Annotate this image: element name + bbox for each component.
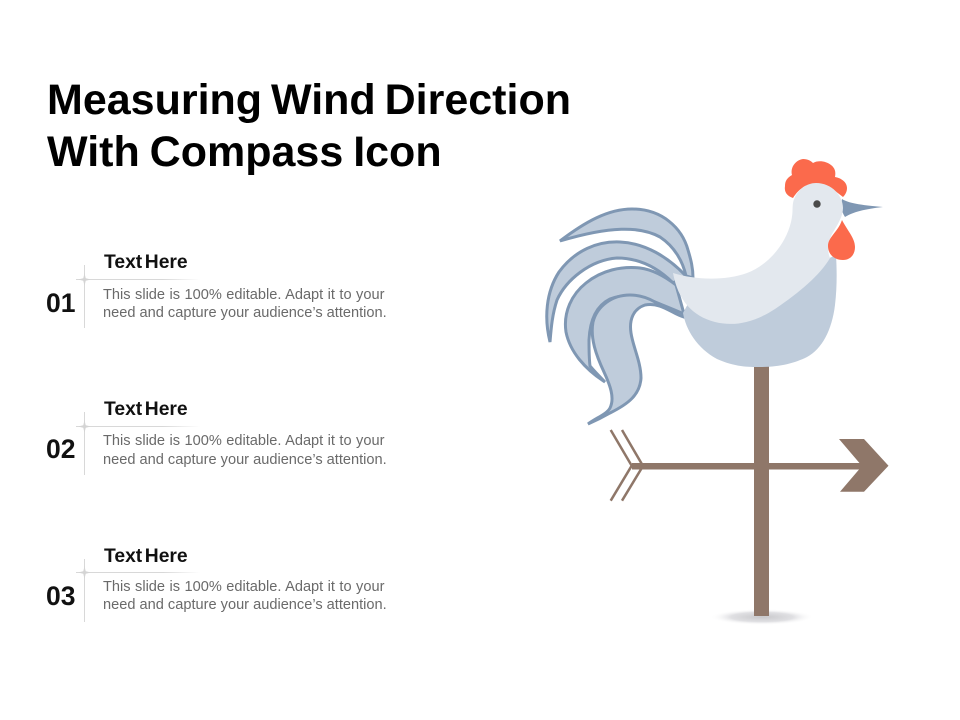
rooster body [683,255,837,367]
item 01 body: This slide is 100% editable. Adapt it to your [103,287,385,303]
item 03 number: 03 [46,581,75,611]
item 02 number: 02 [46,434,75,464]
item 01 heading: Text Here [104,252,188,273]
rooster wattle [828,220,855,260]
item 03 divider cross [76,559,200,622]
arrow head [839,439,888,492]
vane pole [754,360,769,616]
item 01 body: need and capture your audience’s attention. [103,305,387,321]
item 03 body: This slide is 100% editable. Adapt it to your [103,579,385,595]
list item 02 [46,399,387,475]
arrow fletching [611,430,643,501]
item 02 body: This slide is 100% editable. Adapt it to your [103,433,385,449]
item 03 body [103,579,387,613]
title: Measuring Wind Direction [47,76,571,124]
rooster comb [785,159,847,198]
ground shadow [710,609,814,625]
tail feathers [547,209,693,424]
item 03 body: need and capture your audience’s attention. [103,597,387,613]
item 02 heading: Text Here [104,399,188,420]
item 03 heading: Text Here [104,546,188,567]
rooster beak [841,199,883,217]
vane shaft [632,463,864,470]
item 01 body [103,287,387,321]
item 02 body [103,433,387,468]
weather vane illustration [547,159,888,625]
item 01 number: 01 [46,288,75,318]
item 02 divider cross [76,412,200,475]
list item 01 [46,252,387,328]
title [47,76,571,176]
list item 03 [46,546,387,622]
item 02 body: need and capture your audience’s attention. [103,452,387,468]
rooster head and wing [673,183,843,324]
item 01 divider cross [76,265,200,328]
rooster eye [813,200,821,208]
title: With Compass Icon [47,128,442,176]
